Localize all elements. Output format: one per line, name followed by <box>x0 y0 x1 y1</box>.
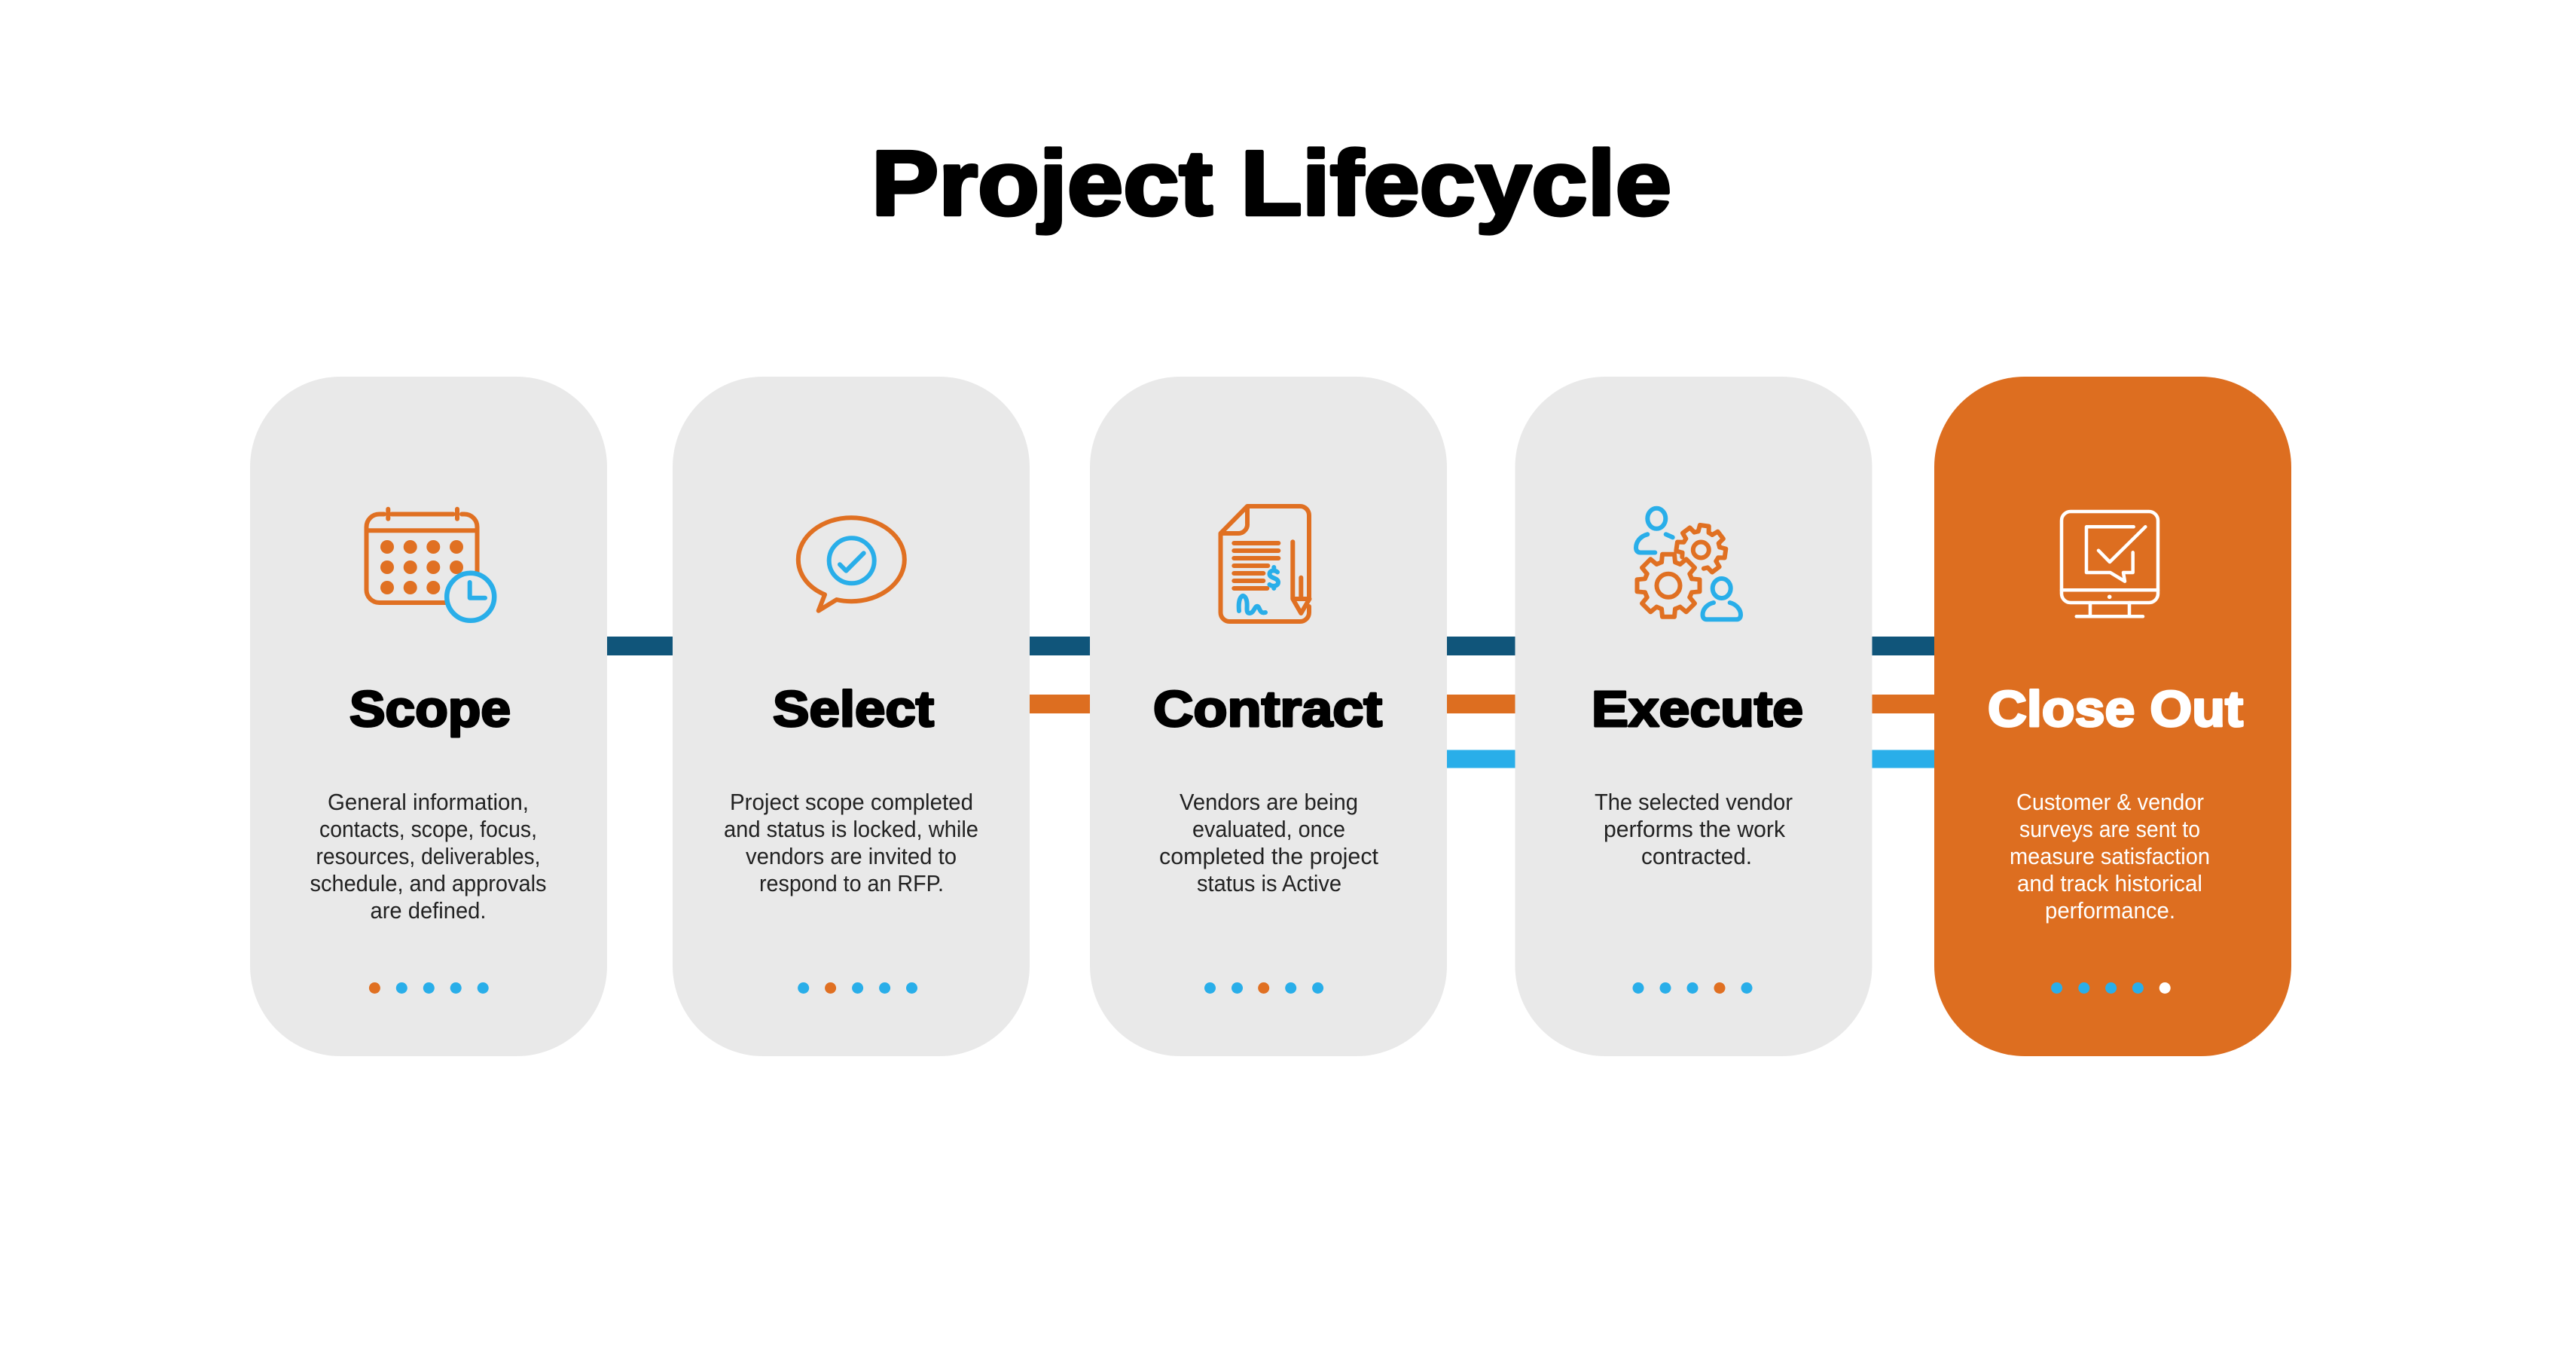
progress dots <box>798 982 917 994</box>
description: performs the work <box>1604 816 1785 842</box>
icon: monitor with check <box>2062 512 2158 616</box>
description: completed the project <box>1159 843 1378 869</box>
description <box>310 789 547 924</box>
icon: speech bubble with check <box>798 518 905 611</box>
progress dots <box>1633 982 1752 994</box>
description: Project scope completed <box>730 789 973 815</box>
heading: Select <box>773 681 934 738</box>
card background <box>1515 377 1872 1056</box>
panel: Contract <box>1090 377 1447 1056</box>
description: and track historical <box>2017 870 2202 896</box>
description: contacts, scope, focus, <box>319 816 537 842</box>
description <box>1595 789 1793 869</box>
card background <box>673 377 1030 1056</box>
progress dots <box>2051 982 2171 994</box>
description: and status is locked, while <box>724 816 978 842</box>
progress dots <box>1204 982 1323 994</box>
description: respond to an RFP. <box>759 870 944 896</box>
description: are defined. <box>371 897 487 924</box>
icon: contract document <box>1220 506 1309 622</box>
title: Project Lifecycle <box>871 132 1671 234</box>
description <box>1159 789 1378 896</box>
description: Vendors are being <box>1180 789 1358 815</box>
description: schedule, and approvals <box>310 870 547 896</box>
description: contracted. <box>1641 843 1752 869</box>
description: Customer & vendor <box>2016 789 2204 815</box>
description: evaluated, once <box>1192 816 1345 842</box>
description: surveys are sent to <box>2019 816 2200 842</box>
description: status is Active <box>1197 870 1341 896</box>
card background <box>250 377 607 1056</box>
panel: Close Out <box>1934 377 2291 1056</box>
connectors: navy line <box>607 637 1935 655</box>
panel: Select <box>673 377 1030 1056</box>
description: vendors are invited to <box>746 843 957 869</box>
heading: Scope <box>349 681 511 738</box>
description: General information, <box>328 789 529 815</box>
description: measure satisfaction <box>2010 843 2210 869</box>
description: The selected vendor <box>1595 789 1793 815</box>
connectors: orange line <box>1030 695 1935 713</box>
description <box>724 789 978 896</box>
panel: Execute <box>1515 377 1872 1056</box>
icon: people and gears <box>1636 508 1741 619</box>
card background <box>1090 377 1447 1056</box>
connectors: blue line <box>1447 750 1935 768</box>
heading: Contract <box>1153 681 1382 738</box>
progress dots <box>369 982 489 994</box>
icon: calendar with clock <box>366 509 494 621</box>
card background <box>1934 377 2291 1056</box>
description: performance. <box>2045 897 2175 924</box>
panel: Scope <box>250 377 607 1056</box>
heading: Close Out <box>1988 681 2243 738</box>
description <box>2010 789 2210 924</box>
description: resources, deliverables, <box>316 843 541 869</box>
heading: Execute <box>1592 681 1803 738</box>
